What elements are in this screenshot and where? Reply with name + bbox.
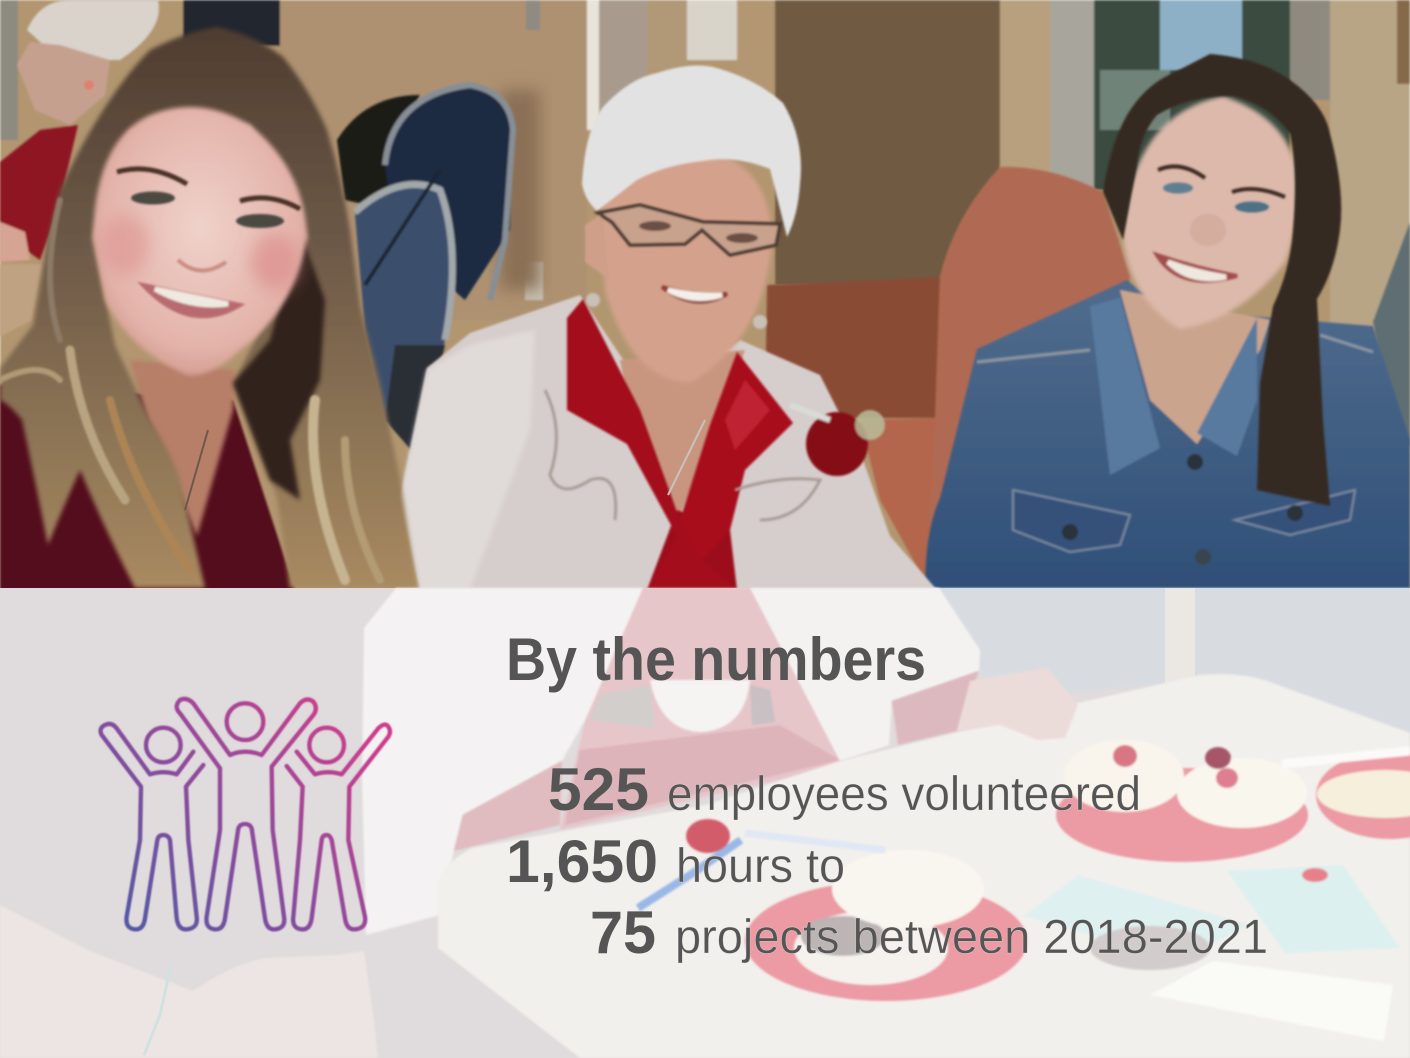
icon: three people with raised arms [101,699,390,929]
faded jacket left [362,588,643,935]
blonde hair highlights [0,200,380,580]
label projects between 2018-2021: projects between 2018-2021 [675,911,1268,964]
faded hand on table [957,668,1078,740]
icon: center figure [177,699,316,929]
facial features [1157,166,1285,281]
bracelet [144,965,171,1055]
neck and chest [130,360,235,536]
spoon with candy heart [638,819,885,908]
faded belt and silver purse [590,680,775,732]
stacked chairs and walker [337,85,513,460]
number 75: 75 [590,899,656,966]
faded forearm and fist [0,905,378,1058]
maroon top [0,385,295,590]
stat: 1,650 hours [506,828,845,895]
room background [0,0,1410,590]
faded left cuff [454,761,562,851]
icon: right figure [287,725,390,929]
soft chair shadow on the wall [500,90,540,290]
elderly woman in background [0,0,159,337]
panel base over dark sweater [0,588,1410,1058]
icon: left figure [101,724,203,929]
neck and chest [620,350,745,515]
necklace [185,430,208,510]
hair [0,27,417,588]
sofa [765,167,1130,590]
volunteer on the left [0,27,417,590]
face [1123,96,1298,329]
dark hair shadow beside the face [233,230,325,500]
chain necklace [668,420,705,495]
face [93,107,307,375]
faded denim jacket [930,588,1410,740]
stat: 75 projects [590,899,1268,966]
facial features [585,205,780,329]
wall painting in silver frame [1050,0,1330,190]
white jacket [400,295,937,590]
stat: 525 employees [548,756,1141,823]
long dark hair [1103,54,1341,506]
translucent white panel with faded table scene [0,588,1410,1058]
faded lower blouse [565,725,840,825]
label employees volunteered: employees volunteered [667,768,1141,821]
center resident [400,65,937,590]
facial features [117,169,300,316]
red satin collar and blouse [567,299,793,590]
denim jacket [925,280,1410,590]
faded red blouse [560,588,845,830]
heading: By the numbers [506,626,926,693]
rosy cheeks [101,215,299,290]
plaid chair on right edge [1373,222,1410,448]
faded shirt strip under denim [1165,588,1195,683]
faded jacket right [750,588,980,761]
number 1,650: 1,650 [506,828,658,895]
plate with cookies, bottom center [745,850,1027,1001]
plate with cookies, top right [1056,740,1308,862]
note cards [1024,865,1400,1041]
label hours to: hours to [676,840,845,893]
white hair [582,65,801,237]
volunteer on the right [925,54,1410,590]
face [600,150,772,383]
table top [438,674,1410,1058]
jacket embroidery [545,390,820,520]
number 525: 525 [548,756,649,823]
red carnation corsage [790,405,885,476]
faded red jacket cuff [892,671,979,745]
plate with cookie, far right [1282,751,1410,839]
